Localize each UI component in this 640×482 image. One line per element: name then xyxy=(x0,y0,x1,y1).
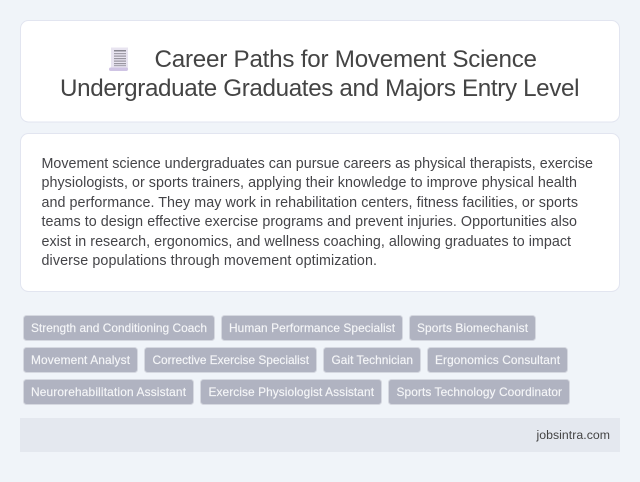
tag: Ergonomics Consultant: Ergonomics Consultant xyxy=(435,353,561,367)
text block: description: exist in research, ergonomics, and wellness coaching, allowing graduates to impact xyxy=(42,234,571,250)
icon: document scroll xyxy=(109,48,128,71)
footer bar xyxy=(20,418,620,452)
tag: Gait Technician xyxy=(324,348,420,372)
tag: Sports Biomechanist: Sports Biomechanist xyxy=(417,321,529,335)
tag: Corrective Exercise Specialist xyxy=(144,348,316,372)
title xyxy=(60,46,580,102)
tag: Movement Analyst: Movement Analyst xyxy=(31,353,131,367)
tag: Human Performance Specialist: Human Performance Specialist xyxy=(229,321,396,335)
tag: Neurorehabilitation Assistant xyxy=(24,380,194,404)
tag: Sports Technology Coordinator xyxy=(388,380,570,404)
tag: Ergonomics Consultant xyxy=(428,348,568,372)
footer source text: jobsintra.com xyxy=(536,428,610,442)
tag: Corrective Exercise Specialist: Corrective Exercise Specialist xyxy=(152,353,310,367)
panel: description card xyxy=(20,134,620,292)
title: Career Paths for Movement Science xyxy=(154,46,537,73)
tag: Sports Biomechanist xyxy=(410,316,536,340)
title: Undergraduate Graduates and Majors Entry Level xyxy=(60,75,580,102)
tag: Exercise Physiologist Assistant: Exercise Physiologist Assistant xyxy=(208,385,375,399)
tag: Strength and Conditioning Coach xyxy=(24,316,214,340)
text block: description: diverse populations through movement optimization. xyxy=(42,253,377,269)
tag: Exercise Physiologist Assistant xyxy=(200,380,382,404)
text block: description: teams to design effective exercise programs and prevent injuries. Opportunities also xyxy=(42,214,577,230)
panel: career tags xyxy=(24,316,570,404)
tag: Human Performance Specialist xyxy=(222,316,402,340)
text block: description: physiologists, or sports trainers, applying their knowledge to improve physical health xyxy=(42,175,577,191)
tag: Neurorehabilitation Assistant: Neurorehabilitation Assistant xyxy=(31,385,187,399)
tag: Gait Technician: Gait Technician xyxy=(332,353,413,367)
tag: Movement Analyst xyxy=(24,348,138,372)
panel: title card xyxy=(20,20,620,122)
text block: description: and performance. They may work in rehabilitation centers, fitness facilities, or sports xyxy=(42,195,578,211)
tag: Strength and Conditioning Coach: Strength and Conditioning Coach xyxy=(31,321,207,335)
tag: Sports Technology Coordinator: Sports Technology Coordinator xyxy=(396,385,562,399)
text block: description: Movement science undergraduates can pursue careers as physical therapists, exercise xyxy=(42,156,593,172)
text block: description xyxy=(42,156,593,269)
